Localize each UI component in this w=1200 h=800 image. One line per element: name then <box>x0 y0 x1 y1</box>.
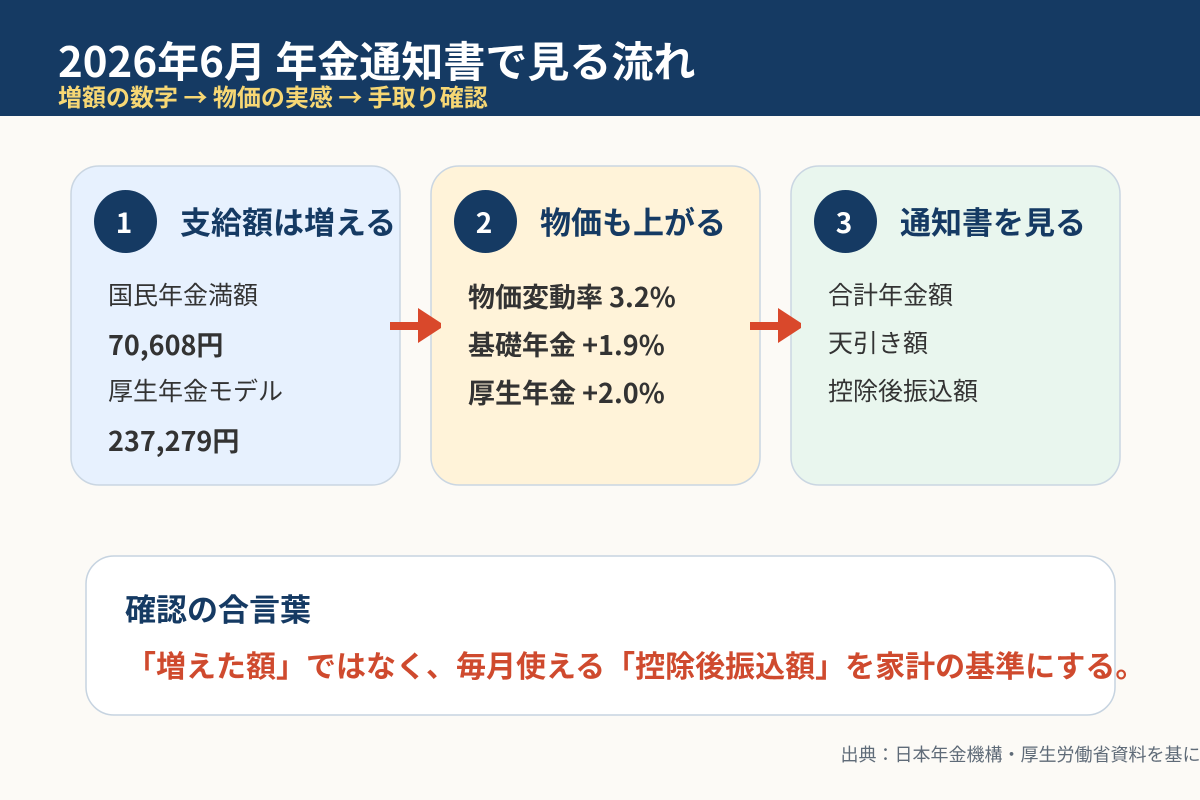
step number 3: 3 <box>836 202 852 242</box>
text: deductions: 天引き額 <box>828 324 928 360</box>
header band <box>0 0 1200 116</box>
arrow: step 2 to step 3 <box>750 308 801 343</box>
step number 1: 1 <box>116 202 132 242</box>
title: 2026年6月 年金通知書で見る流れ <box>58 29 695 90</box>
callout message: 「増えた額」ではなく、毎月使える「控除後振込額」を家計の基準にする。 <box>126 642 1145 686</box>
heading: step 3: 通知書を見る <box>900 198 1086 243</box>
text: employees pension: 厚生年金 +2.0% <box>468 372 665 411</box>
step number 3 <box>814 190 877 253</box>
arrow: step 1 to step 2 <box>390 308 441 343</box>
text: inflation rate: 物価変動率 3.2% <box>468 276 676 315</box>
source note: 出典：日本年金機構・厚生労働省資料を基に <box>840 741 1200 767</box>
panel: step 1 <box>71 166 400 485</box>
text: basic pension: 基礎年金 +1.9% <box>468 324 665 363</box>
step number 2: 2 <box>476 202 492 242</box>
heading: step 1: 支給額は増える <box>180 198 396 243</box>
text: national pension: 国民年金満額 <box>108 276 258 312</box>
panel: keyword callout <box>86 556 1145 715</box>
value: employees pension: 237,279円 <box>108 420 239 459</box>
text: total pension: 合計年金額 <box>828 276 953 312</box>
panel: step 2 <box>431 166 760 485</box>
text: employees pension: 厚生年金モデル <box>108 372 283 408</box>
value: national pension: 70,608円 <box>108 324 223 363</box>
panel: step 3 <box>791 166 1120 485</box>
subtitle: 増額の数字 → 物価の実感 → 手取り確認 <box>58 78 488 113</box>
step number 1 <box>94 190 157 253</box>
text: net payment: 控除後振込額 <box>828 372 978 408</box>
heading: callout: 確認の合言葉 <box>125 585 311 630</box>
step number 2 <box>454 190 517 253</box>
heading: step 2: 物価も上がる <box>540 198 726 243</box>
